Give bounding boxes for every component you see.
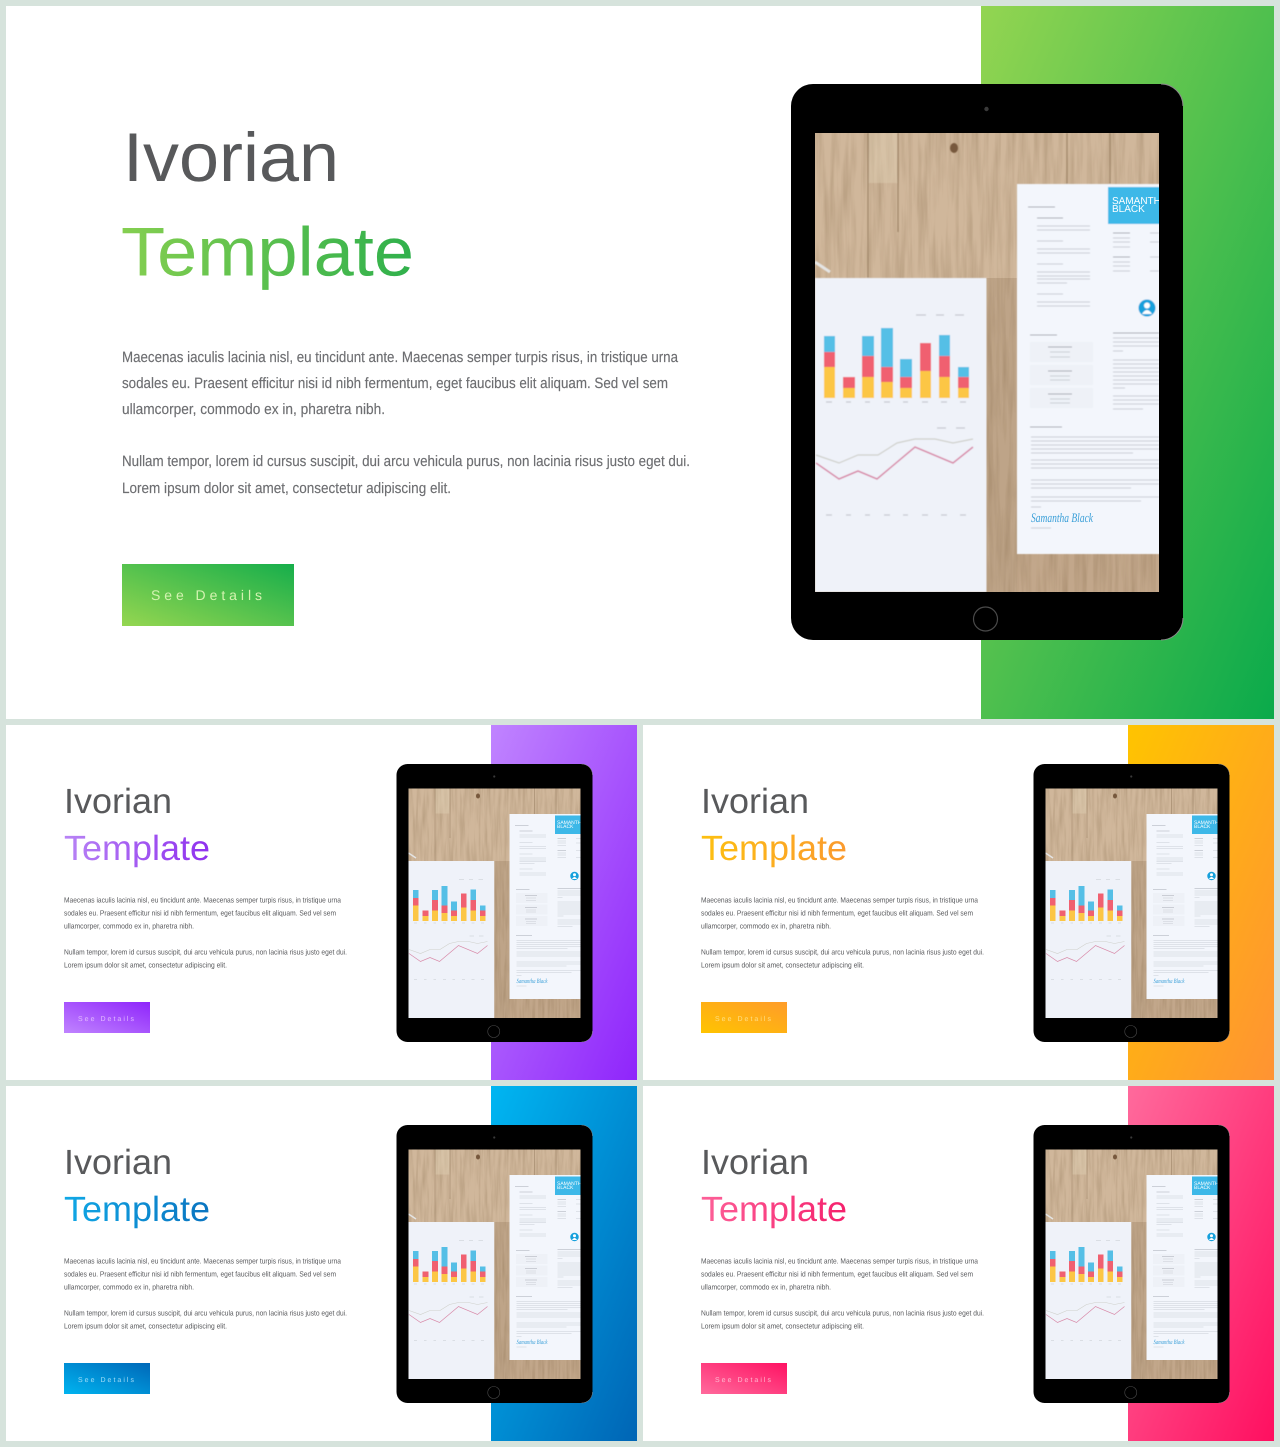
heading: Ivorian: Ivorian <box>123 119 339 196</box>
tablet mockup: SAMANTHA <box>1194 820 1222 826</box>
body text: ullamcorper, commodo ex in, pharetra nibh. <box>64 1282 194 1292</box>
body text: sodales eu. Praesent efficitur nisi id nibh fermentum, eget faucibus elit aliquam. Sed vel sem <box>701 1270 973 1278</box>
body text: Maecenas iaculis lacinia nisl, eu tincidunt ante. Maecenas semper turpis risus, in tristique urna <box>701 896 979 904</box>
tablet mockup: BLACK <box>557 1185 574 1190</box>
body text: Lorem ipsum dolor sit amet, consectetur adipiscing elit. <box>701 960 864 970</box>
panel: pink slide <box>643 1086 1274 1441</box>
button: See Details <box>64 1363 150 1394</box>
tablet mockup <box>791 84 1183 640</box>
body text: sodales eu. Praesent efficitur nisi id nibh fermentum, eget faucibus elit aliquam. Sed vel sem <box>64 908 336 918</box>
body text: ullamcorper, commodo ex in, pharetra nibh. <box>701 1282 831 1292</box>
heading: Template: Template <box>121 214 414 290</box>
tablet mockup: BLACK <box>1194 824 1211 830</box>
heading: Template: Template <box>64 1190 210 1229</box>
heading: Ivorian: Ivorian <box>701 782 809 821</box>
body text: Nullam tempor, lorem id cursus suscipit, dui arcu vehicula purus, non lacinia risus justo eget dui. <box>701 948 984 956</box>
body text: Maecenas iaculis lacinia nisl, eu tincidunt ante. Maecenas semper turpis risus, in tristique urna <box>64 896 342 904</box>
body text: Maecenas iaculis lacinia nisl, eu tincidunt ante. Maecenas semper turpis risus, in tristique urna <box>701 1256 979 1266</box>
heading: Ivorian: Ivorian <box>64 1143 172 1182</box>
body text: Lorem ipsum dolor sit amet, consectetur adipiscing elit. <box>64 1322 227 1330</box>
tablet mockup: BLACK <box>557 824 574 830</box>
panel: blue slide <box>6 1086 637 1441</box>
tablet mockup: Samantha Black <box>1154 977 1185 984</box>
body text <box>64 896 347 970</box>
button: See Details: See Details <box>78 1376 134 1384</box>
tablet mockup: BLACK <box>1112 204 1145 215</box>
tablet mockup <box>1034 1125 1230 1403</box>
heading: Template: Template <box>701 1190 847 1229</box>
panel: large green slide <box>6 6 1274 719</box>
body text: Lorem ipsum dolor sit amet, consectetur adipiscing elit. <box>122 480 451 497</box>
body text <box>122 349 690 497</box>
button: See Details <box>701 1363 787 1394</box>
tablet mockup: Samantha Black <box>516 977 548 984</box>
button: See Details <box>701 1002 787 1033</box>
button: See Details <box>64 1002 150 1033</box>
tablet mockup: SAMANTHA <box>557 1181 585 1186</box>
body text: Nullam tempor, lorem id cursus suscipit, dui arcu vehicula purus, non lacinia risus justo eget dui. <box>64 948 347 956</box>
body text <box>701 1256 984 1330</box>
heading: Ivorian: Ivorian <box>701 1143 809 1182</box>
body text: Nullam tempor, lorem id cursus suscipit, dui arcu vehicula purus, non lacinia risus justo eget dui. <box>64 1308 347 1318</box>
green gradient band <box>981 6 1274 719</box>
body text: Maecenas iaculis lacinia nisl, eu tincidunt ante. Maecenas semper turpis risus, in tristique urna <box>64 1256 342 1266</box>
tablet mockup: SAMANTHA <box>1112 196 1168 207</box>
body text: Maecenas iaculis lacinia nisl, eu tincidunt ante. Maecenas semper turpis risus, in tristique urna <box>122 349 679 366</box>
purple gradient band <box>491 725 637 1080</box>
body text: Nullam tempor, lorem id cursus suscipit, dui arcu vehicula purus, non lacinia risus justo eget dui. <box>122 453 690 470</box>
tablet mockup <box>1034 764 1230 1042</box>
tablet mockup: Samantha Black <box>516 1338 548 1346</box>
body text: ullamcorper, commodo ex in, pharetra nibh. <box>122 401 385 418</box>
tablet mockup: SAMANTHA <box>1194 1181 1222 1186</box>
tablet mockup: BLACK <box>1194 1185 1211 1190</box>
panel: yellow slide <box>643 725 1274 1080</box>
body text: sodales eu. Praesent efficitur nisi id nibh fermentum, eget faucibus elit aliquam. Sed vel sem <box>701 908 973 918</box>
button: See Details: See Details <box>151 587 262 603</box>
body text <box>701 896 984 970</box>
body text: Lorem ipsum dolor sit amet, consectetur adipiscing elit. <box>64 960 227 970</box>
body text: sodales eu. Praesent efficitur nisi id nibh fermentum, eget faucibus elit aliquam. Sed vel sem <box>64 1270 336 1278</box>
body text: ullamcorper, commodo ex in, pharetra nibh. <box>701 922 831 930</box>
body text: ullamcorper, commodo ex in, pharetra nibh. <box>64 922 194 930</box>
heading: Ivorian: Ivorian <box>64 782 172 821</box>
button: See Details: See Details <box>715 1015 772 1023</box>
tablet mockup <box>396 764 592 1042</box>
yellow gradient band <box>1128 725 1274 1080</box>
tablet mockup: Samantha Black <box>1031 510 1093 525</box>
button: See Details: See Details <box>78 1015 134 1023</box>
tablet mockup: SAMANTHA <box>557 820 585 826</box>
body text <box>64 1256 347 1330</box>
heading: Template: Template <box>701 829 847 868</box>
button: See Details: See Details <box>715 1376 772 1384</box>
body text: sodales eu. Praesent efficitur nisi id nibh fermentum, eget faucibus elit aliquam. Sed vel sem <box>122 375 668 392</box>
body text: Nullam tempor, lorem id cursus suscipit, dui arcu vehicula purus, non lacinia risus justo eget dui. <box>701 1308 984 1318</box>
heading: Template: Template <box>64 829 210 868</box>
button: See Details <box>122 564 294 626</box>
panel: purple slide <box>6 725 637 1080</box>
blue gradient band <box>491 1086 637 1441</box>
tablet mockup <box>396 1125 592 1403</box>
tablet mockup: Samantha Black <box>1154 1338 1185 1346</box>
body text: Lorem ipsum dolor sit amet, consectetur adipiscing elit. <box>701 1322 864 1330</box>
pink gradient band <box>1128 1086 1274 1441</box>
